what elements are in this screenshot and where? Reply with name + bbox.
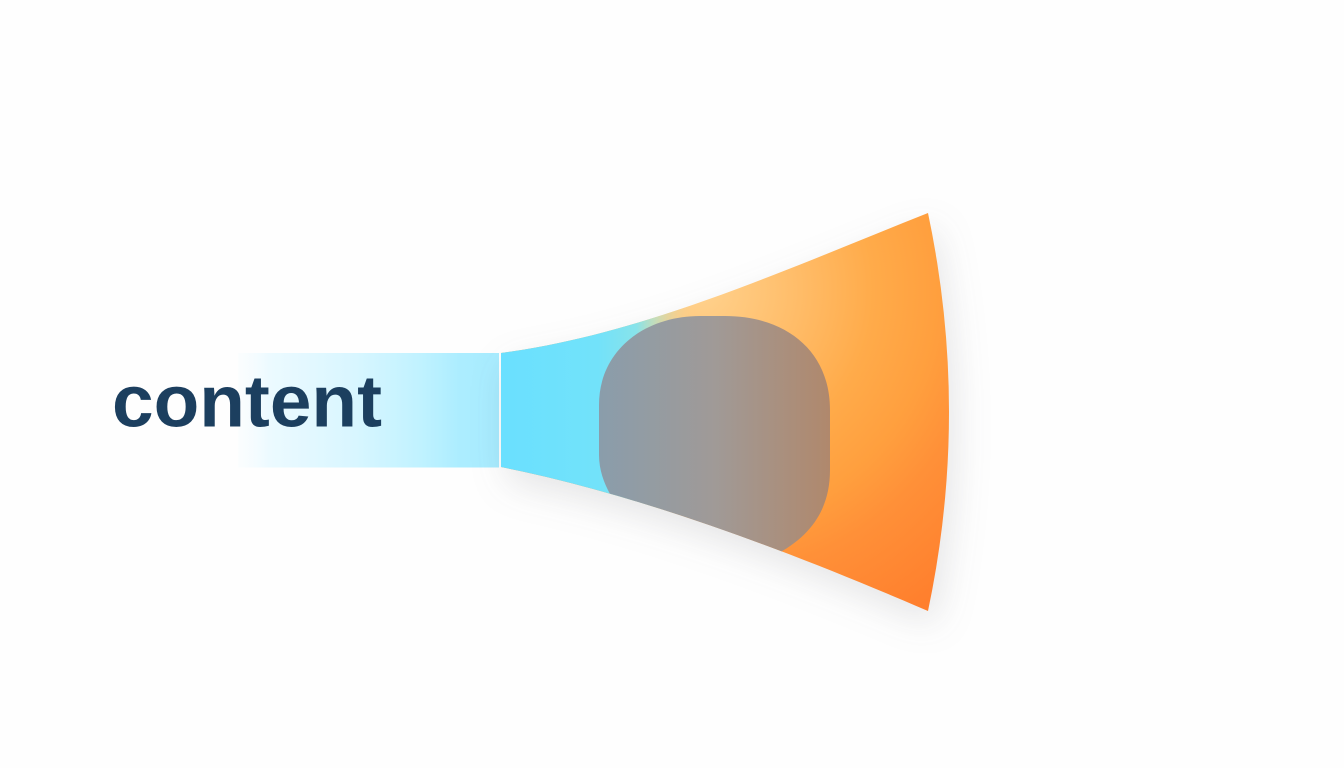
funnel diagram — [114, 213, 962, 621]
content label: content — [112, 362, 382, 442]
central overlay shape — [599, 316, 830, 555]
funnel cone — [501, 213, 949, 611]
input band — [238, 353, 499, 468]
